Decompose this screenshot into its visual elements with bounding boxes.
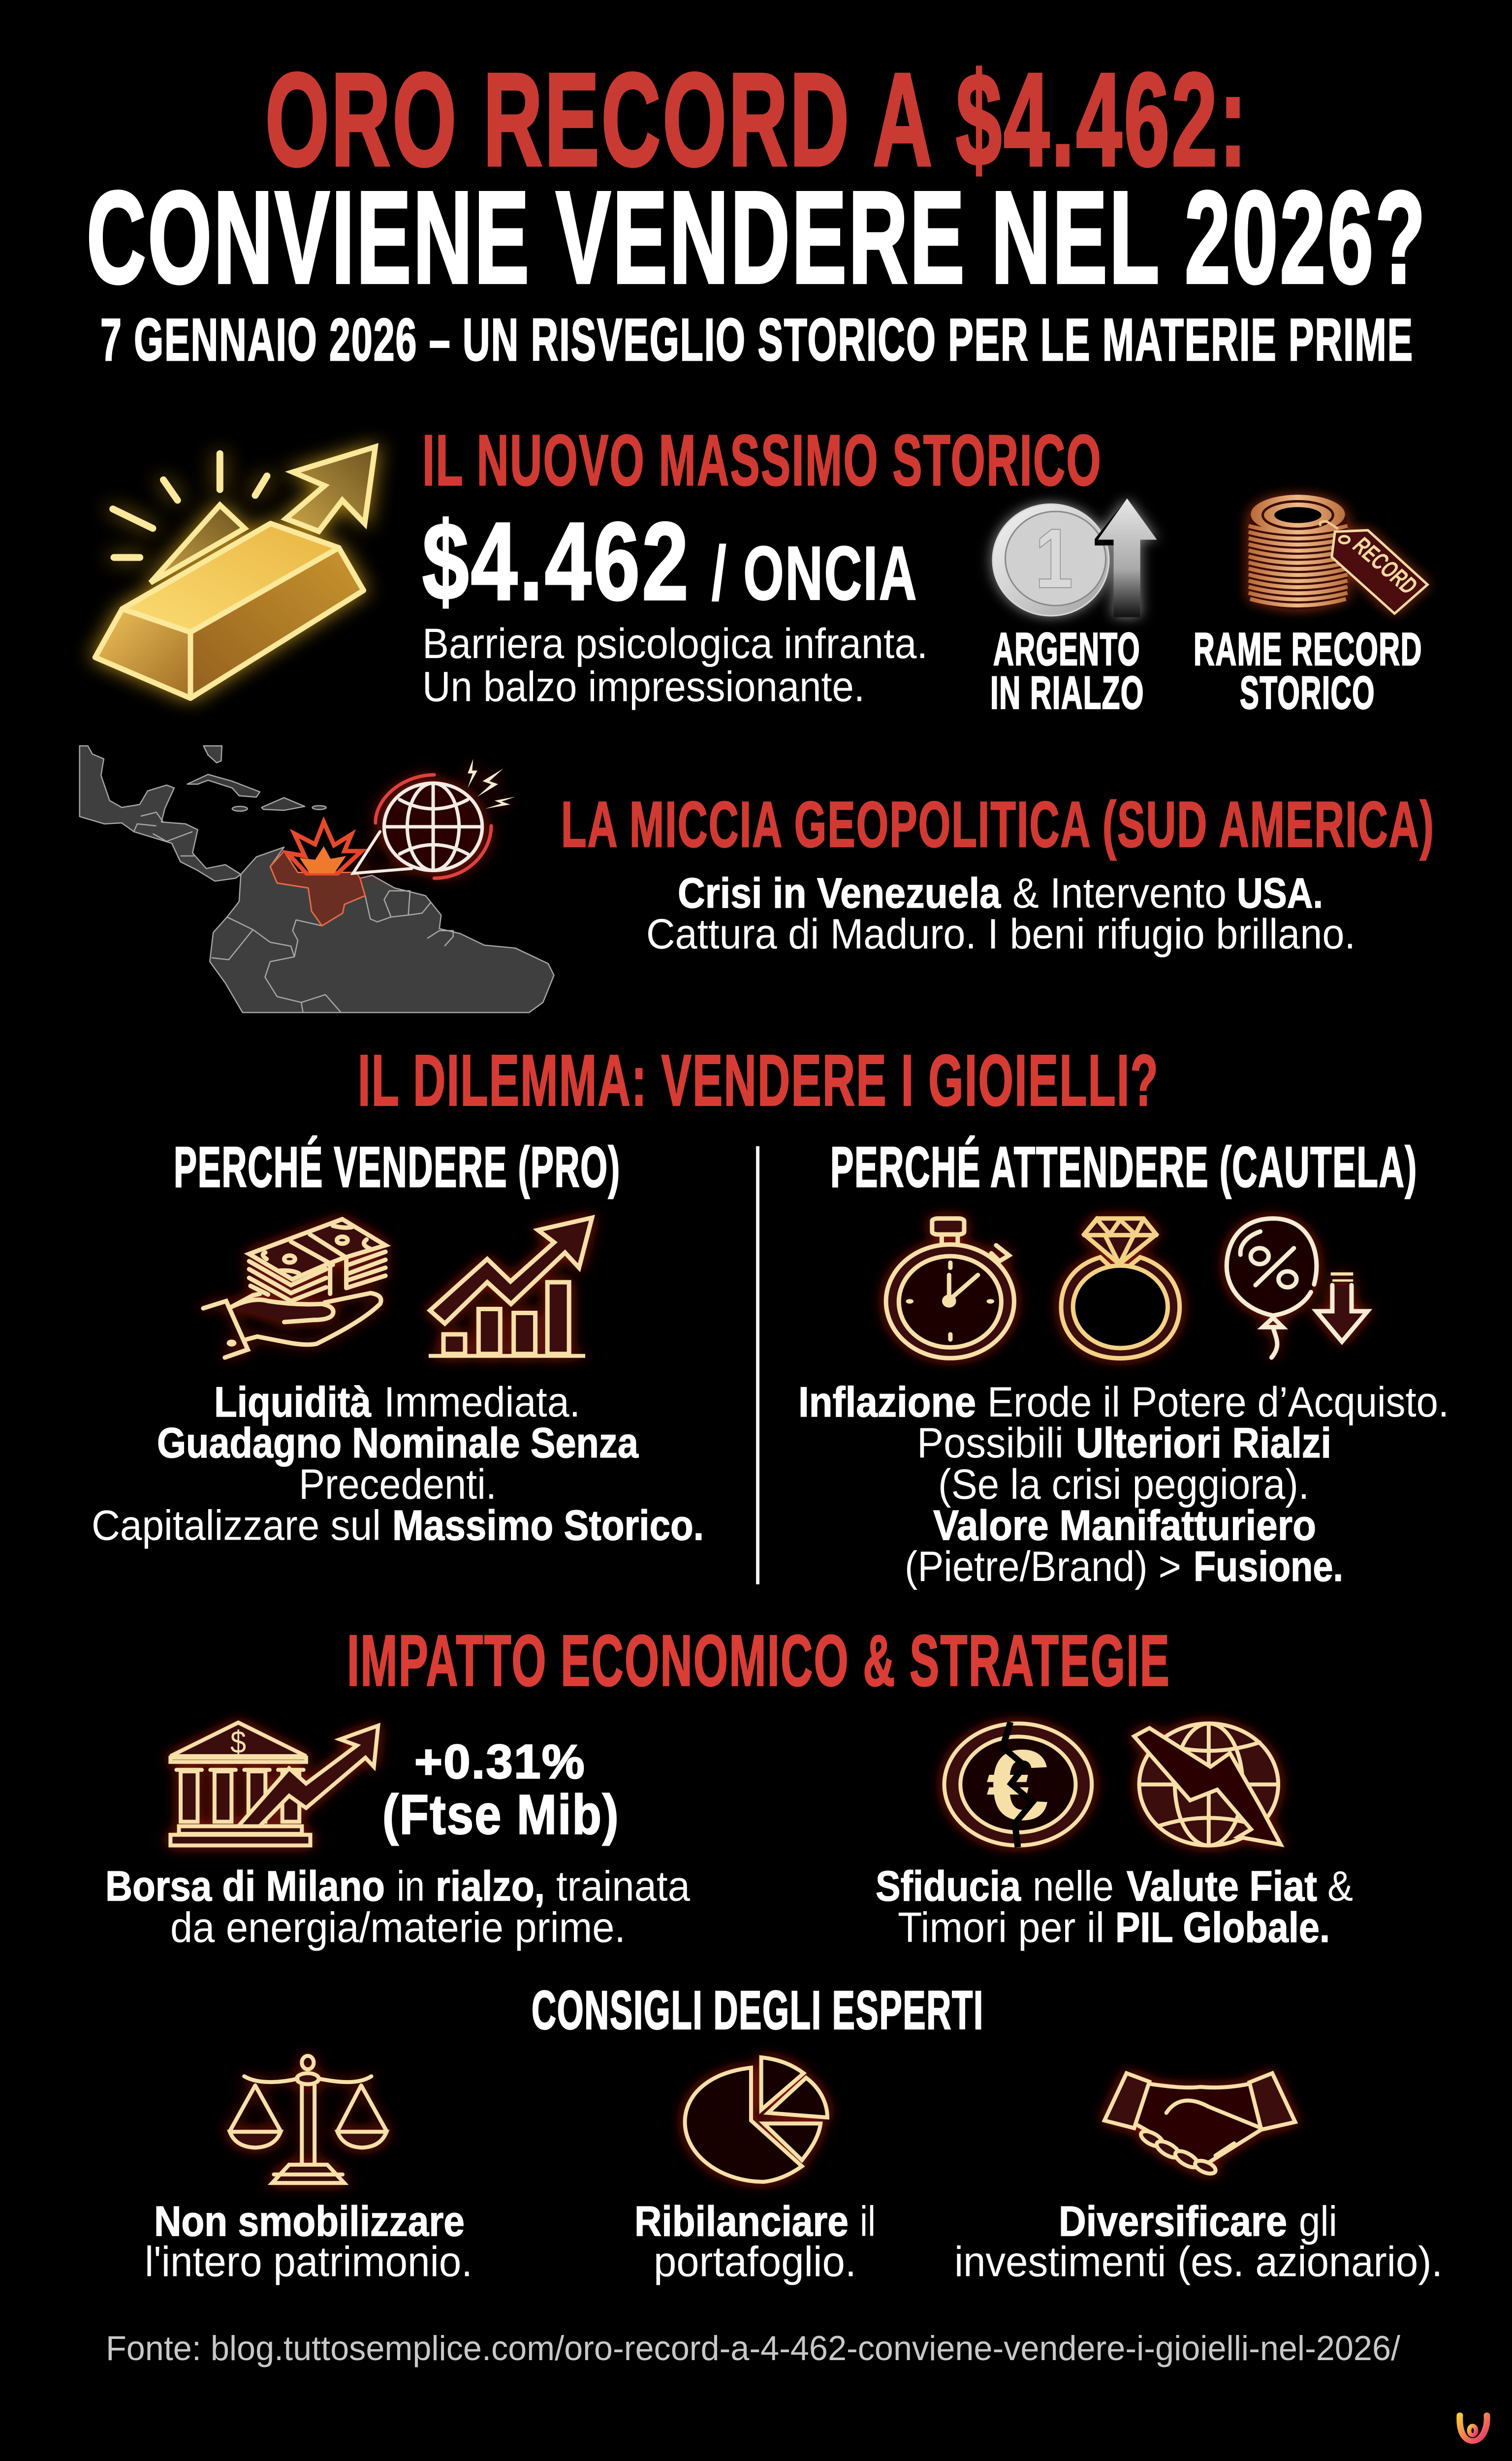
text block bbox=[92, 1378, 704, 1549]
label silver bbox=[990, 624, 1144, 719]
icon: bank with arrow bbox=[170, 1723, 378, 1845]
icon: cracked euro coin bbox=[945, 1722, 1092, 1847]
text block: Fusione. bbox=[1194, 1542, 1343, 1590]
panel: borsa di milano bbox=[105, 1723, 691, 1951]
text block: & bbox=[1327, 1862, 1353, 1910]
crack bbox=[1003, 1722, 1033, 1847]
icon: silver coin with arrow bbox=[993, 499, 1157, 617]
tip 2: Ribilanciare bbox=[634, 2197, 849, 2245]
icon: stopwatch bbox=[886, 1219, 1014, 1358]
tip 1: l'intero patrimonio. bbox=[145, 2238, 472, 2285]
text block: Ulteriori Rialzi bbox=[1076, 1419, 1331, 1467]
subheading: PERCHÉ VENDERE (PRO) bbox=[174, 1136, 621, 1199]
text block: rialzo, bbox=[436, 1862, 545, 1910]
text block: PIL Globale. bbox=[1115, 1903, 1330, 1951]
icon: handshake bbox=[1104, 2073, 1295, 2175]
unit: / ONCIA bbox=[712, 531, 918, 616]
title block bbox=[87, 45, 1427, 373]
description: Un balzo impressionante. bbox=[422, 663, 865, 710]
tip 1: Non smobilizzare bbox=[154, 2197, 465, 2245]
dollar sign: $ bbox=[230, 1725, 246, 1760]
icon: copper coil with record tag bbox=[1249, 495, 1427, 614]
price: $4.462 bbox=[422, 500, 691, 623]
text block bbox=[105, 1862, 691, 1951]
text block: da energia/materie prime. bbox=[170, 1903, 626, 1951]
text block: Valore Manifatturiero bbox=[933, 1501, 1316, 1549]
label copper bbox=[1194, 624, 1422, 719]
panel: perché vendere bbox=[92, 1136, 704, 1549]
value: +0.31% bbox=[414, 1735, 586, 1788]
text block: Guadagno Nominale Senza bbox=[157, 1419, 638, 1467]
text block: (Se la crisi peggiora). bbox=[938, 1460, 1309, 1508]
text block: Valute Fiat bbox=[1127, 1862, 1317, 1910]
icon: globe with falling arrow bbox=[1134, 1724, 1281, 1845]
text block: trainata bbox=[556, 1862, 691, 1910]
text block: (Pietre/Brand) > bbox=[905, 1542, 1181, 1590]
panel: perché attendere bbox=[798, 1136, 1449, 1590]
tip 1 bbox=[145, 2197, 472, 2285]
icon: explosion bbox=[287, 822, 362, 873]
description: Barriera psicologica infranta. bbox=[422, 619, 928, 667]
tip 2: portafoglio. bbox=[654, 2238, 856, 2285]
text block: USA. bbox=[1237, 869, 1323, 917]
label silver: ARGENTO bbox=[993, 624, 1140, 675]
divider bbox=[756, 1146, 759, 1584]
text block bbox=[646, 869, 1355, 958]
text block: Inflazione bbox=[798, 1378, 976, 1426]
tip 3: gli bbox=[1299, 2197, 1337, 2245]
text block: Sfiducia bbox=[876, 1862, 1021, 1910]
panel: nuovo massimo storico bbox=[95, 420, 1427, 719]
euro glyph: € bbox=[986, 1729, 1049, 1841]
text block: Timori per il bbox=[898, 1903, 1104, 1951]
map of Caribbean and South America bbox=[80, 746, 554, 1012]
icon: scales bbox=[230, 2056, 386, 2183]
tip 3: Diversificare bbox=[1059, 2197, 1287, 2245]
text block: Capitalizzare sul bbox=[92, 1501, 381, 1549]
text block: Cattura di Maduro. I beni rifugio brillano. bbox=[646, 910, 1355, 958]
text block: Crisi in Venezuela bbox=[678, 869, 1001, 917]
icon: diamond ring bbox=[1061, 1219, 1180, 1358]
text block: Massimo Storico. bbox=[392, 1501, 704, 1549]
text block bbox=[876, 1862, 1353, 1951]
tip 2: il bbox=[860, 2197, 876, 2245]
heading: consigli degli esperti: CONSIGLI DEGLI ESPERTI bbox=[532, 1980, 984, 2041]
icon: logo bbox=[1460, 2415, 1487, 2441]
icon: globe with lightning bbox=[353, 759, 515, 878]
icon: pie chart bbox=[685, 2057, 827, 2182]
text block: nelle bbox=[1033, 1862, 1114, 1910]
label silver: IN RIALZO bbox=[990, 667, 1144, 719]
text block: Liquidità bbox=[214, 1378, 371, 1426]
icon: hand with money bbox=[203, 1219, 385, 1357]
text block: Possibili bbox=[917, 1419, 1064, 1467]
tag text: RECORD bbox=[1347, 533, 1424, 599]
tip 2 bbox=[634, 2197, 876, 2285]
value bbox=[382, 1735, 620, 1846]
panel: consigli bbox=[145, 2056, 1443, 2285]
value: (Ftse Mib) bbox=[382, 1784, 620, 1846]
text block: Borsa di Milano bbox=[105, 1862, 385, 1910]
panel: miccia geopolitica bbox=[80, 746, 1435, 1012]
label copper: STORICO bbox=[1240, 667, 1375, 719]
text block bbox=[798, 1378, 1449, 1590]
text block: & Intervento bbox=[1012, 869, 1227, 917]
description bbox=[422, 619, 928, 710]
silver coin numeral: 1 bbox=[1035, 511, 1073, 605]
icon: gold bar with arrow bbox=[95, 447, 375, 698]
icon: balloon with percent bbox=[1227, 1219, 1368, 1357]
icon: rising chart bbox=[429, 1218, 592, 1358]
text block: in bbox=[397, 1862, 425, 1910]
Venezuela bbox=[270, 851, 365, 926]
text block: Precedenti. bbox=[299, 1460, 497, 1508]
text block: Immediata. bbox=[384, 1378, 580, 1426]
panel: valute e PIL bbox=[876, 1722, 1353, 1951]
tip 3 bbox=[954, 2197, 1443, 2285]
